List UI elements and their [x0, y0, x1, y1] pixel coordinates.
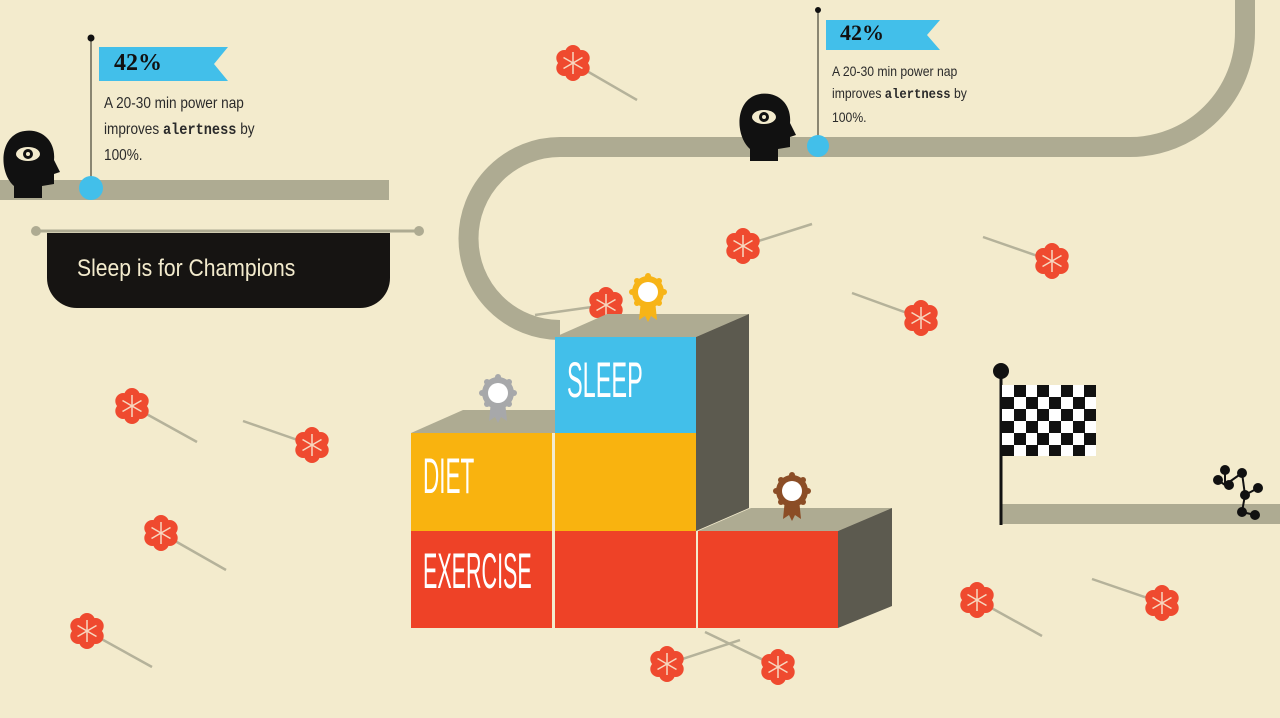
podium labels: SLEEP — [567, 352, 643, 408]
callout: right stat: 42% — [840, 20, 884, 45]
callout: right stat: A 20-30 min power nap — [832, 63, 957, 79]
podium labels: DIET — [423, 448, 474, 504]
podium labels — [423, 352, 643, 599]
podium labels: EXERCISE — [423, 543, 532, 599]
callout: right stat — [832, 20, 967, 125]
callout: left stat: A 20-30 min power nap — [104, 95, 244, 112]
podium — [411, 314, 892, 628]
title bar line — [31, 226, 424, 236]
callout: left stat: 42% — [114, 50, 162, 76]
title: Sleep is for Champions — [77, 255, 295, 282]
callout: left stat — [104, 50, 255, 164]
callout: left stat: 100%. — [104, 147, 143, 164]
callout: right stat: improves alertness by — [832, 85, 967, 103]
callout: left stat: improves alertness by — [104, 121, 255, 139]
ribbons — [479, 273, 811, 521]
road: winding path — [0, 0, 1280, 514]
finish flag — [993, 363, 1096, 525]
heads — [3, 94, 796, 198]
icon: molecule — [1214, 466, 1262, 519]
flowers with stems — [70, 45, 1179, 685]
callout poles — [79, 7, 940, 200]
title — [47, 233, 390, 308]
callout: right stat: 100%. — [832, 109, 867, 125]
